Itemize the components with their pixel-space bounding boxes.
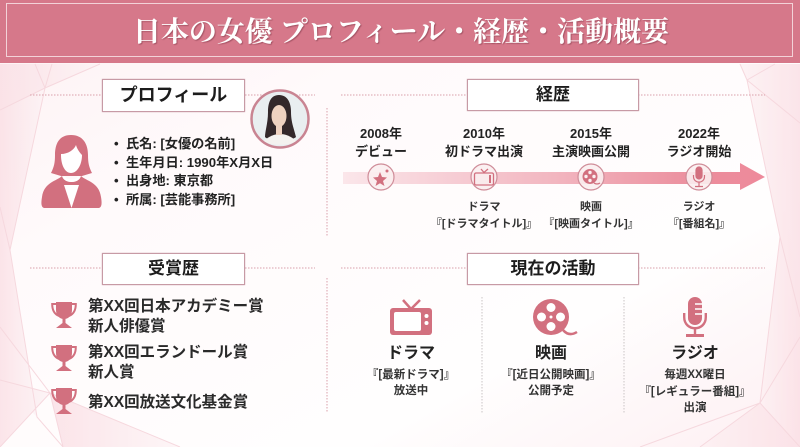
award 1 bbox=[51, 298, 264, 335]
award text bbox=[88, 344, 248, 380]
title banner bbox=[0, 0, 800, 63]
note: radio: ラジオ bbox=[683, 201, 715, 213]
heading: career bbox=[467, 79, 639, 111]
icon: trophy bbox=[51, 302, 77, 328]
note: drama bbox=[431, 201, 537, 230]
award text: 第XX回日本アカデミー賞 bbox=[88, 298, 264, 314]
heading: activities bbox=[467, 253, 639, 285]
activity: drama: ドラマ bbox=[387, 345, 435, 362]
icon: film reel bbox=[533, 299, 578, 336]
milestone: 2008: 2008年 bbox=[360, 126, 402, 141]
profile list: • 所属: [芸能事務所] bbox=[114, 192, 235, 207]
note: film: 映画 bbox=[580, 201, 602, 213]
activity text: drama bbox=[367, 368, 455, 396]
award text: 第XX回エランドール賞 bbox=[88, 344, 248, 361]
milestone: 2010: 2010年 bbox=[463, 126, 505, 141]
arrow: timeline bbox=[343, 163, 765, 191]
note: film bbox=[543, 200, 639, 230]
heading: activities: 現在の活動 bbox=[510, 259, 596, 278]
profile list bbox=[114, 136, 273, 207]
milestone: 2010: 初ドラマ出演 bbox=[445, 144, 523, 159]
milestone: 2015: 主演映画公開 bbox=[552, 144, 630, 159]
profile list: • 氏名: [女優の名前] bbox=[114, 136, 235, 151]
profile list: • 出身地: 東京都 bbox=[114, 173, 213, 188]
milestone: 2022 bbox=[667, 126, 732, 159]
activity: radio: ラジオ bbox=[671, 345, 719, 362]
activity text: drama: 放送中 bbox=[394, 384, 428, 396]
note: radio: 『[番組名]』 bbox=[668, 218, 730, 230]
icon: trophy bbox=[51, 388, 77, 414]
icon: microphone bbox=[683, 297, 707, 337]
award text: 新人賞 bbox=[88, 364, 135, 380]
activity text: radio: 『[レギュラー番組]』 bbox=[639, 386, 751, 398]
icon: tv bbox=[390, 299, 432, 335]
activity text: film bbox=[501, 368, 601, 396]
milestone: 2015: 2015年 bbox=[570, 126, 612, 141]
icon: woman silhouette bbox=[41, 135, 102, 208]
activity: film: 映画 bbox=[535, 345, 567, 362]
milestone: 2015 bbox=[552, 126, 630, 159]
milestone: 2022: 2022年 bbox=[678, 126, 720, 141]
icon: tv small bbox=[474, 169, 494, 185]
milestone: 2022: ラジオ開始 bbox=[667, 144, 731, 159]
milestone: 2008 bbox=[355, 126, 407, 159]
activity text: radio bbox=[639, 368, 751, 414]
panel: current activities bbox=[367, 252, 751, 414]
activity text: radio: 毎週XX曜日 bbox=[664, 369, 726, 381]
award 2 bbox=[51, 344, 248, 380]
icon: trophy bbox=[51, 345, 77, 371]
photo: portrait bbox=[250, 89, 310, 149]
activity text: drama: 『[最新ドラマ]』 bbox=[367, 369, 455, 381]
note: radio bbox=[668, 201, 730, 230]
award text: 第XX回放送文化基金賞 bbox=[88, 394, 248, 411]
note: film: 『[映画タイトル]』 bbox=[543, 218, 639, 230]
heading: career: 経歴 bbox=[536, 85, 570, 104]
milestone: 2010 bbox=[445, 126, 523, 159]
panel: career timeline bbox=[343, 78, 765, 230]
profile list: • 生年月日: 1990年X月X日 bbox=[114, 155, 273, 170]
award text: 新人俳優賞 bbox=[88, 318, 166, 335]
panel: profile bbox=[41, 78, 310, 208]
panel: awards bbox=[51, 252, 264, 414]
milestone: 2008: デビュー bbox=[355, 144, 407, 159]
title: 日本の女優 プロフィール・経歴・活動概要 bbox=[133, 17, 669, 48]
heading: profile: プロフィール bbox=[120, 85, 227, 105]
icon: microphone small bbox=[694, 167, 704, 186]
note: drama: 『[ドラマタイトル]』 bbox=[431, 218, 537, 230]
heading: awards bbox=[102, 253, 245, 285]
heading: awards: 受賞歴 bbox=[148, 259, 199, 278]
award text bbox=[88, 298, 264, 335]
activity text: radio: 出演 bbox=[683, 402, 706, 414]
heading: profile bbox=[102, 79, 245, 112]
award 3 bbox=[51, 388, 248, 414]
activity text: film: 『[近日公開映画]』 bbox=[501, 369, 601, 381]
icon: film reel small bbox=[582, 169, 600, 184]
icon: star bbox=[373, 170, 388, 186]
activity text: film: 公開予定 bbox=[528, 384, 574, 396]
note: drama: ドラマ bbox=[467, 201, 500, 213]
